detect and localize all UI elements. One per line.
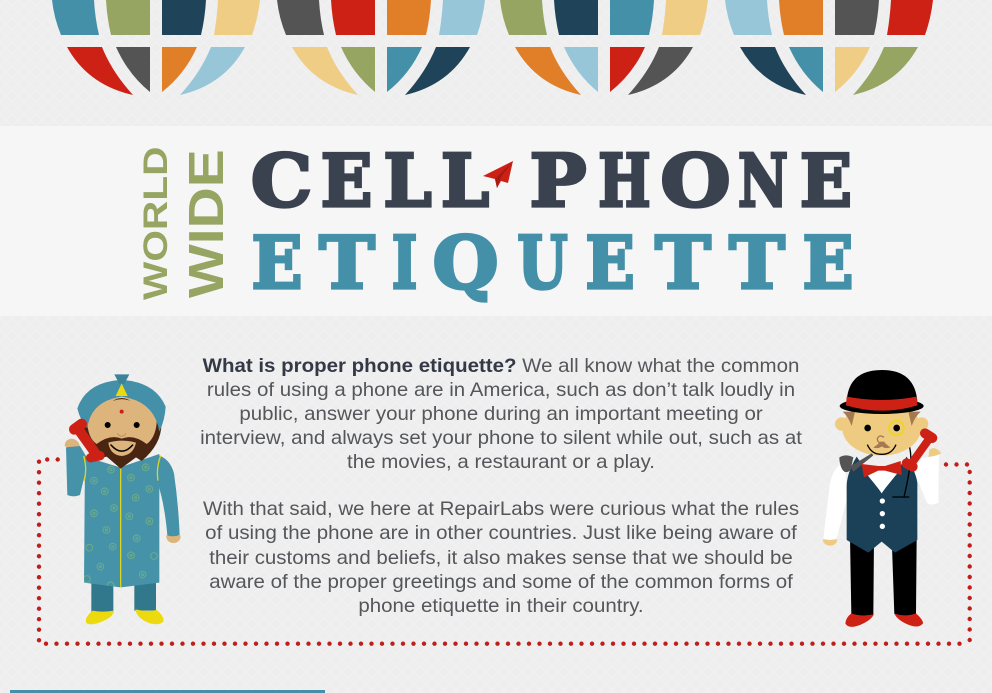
intro paragraph 1: rules of using a phone are in America, such as don’t talk loudly in <box>207 379 795 401</box>
turban knot <box>114 374 129 384</box>
waistcoat <box>847 457 917 553</box>
ears <box>835 417 928 431</box>
title: etiquette <box>251 221 854 306</box>
right white sleeve <box>913 455 939 505</box>
intro paragraph 2: phone etiquette in their country. <box>358 595 644 617</box>
eyes <box>105 422 140 428</box>
intro paragraph 1 <box>200 355 802 473</box>
intro paragraph 2 <box>203 498 799 617</box>
left hand <box>823 539 837 546</box>
character: man in turban on red phone <box>65 374 181 624</box>
title: world wide: WORLD <box>136 147 174 300</box>
title: cell phone: C <box>251 138 312 223</box>
title: world wide <box>136 147 234 300</box>
phone handset <box>907 433 932 467</box>
title: etiquette: E <box>251 222 303 306</box>
title: etiquette: T <box>729 221 785 306</box>
next section heading bar <box>10 690 325 693</box>
face <box>87 397 157 444</box>
hair parting <box>113 398 131 401</box>
title: etiquette: U <box>517 222 568 306</box>
title: cell phone: O <box>660 139 731 224</box>
title band <box>0 126 992 316</box>
trousers <box>850 537 917 616</box>
title: world wide: WIDE <box>180 149 234 298</box>
dotted red frame <box>39 460 970 644</box>
globe 3 <box>500 0 708 95</box>
trousers <box>91 582 156 613</box>
waistcoat buttons <box>880 498 885 529</box>
mouth area <box>108 441 136 456</box>
phone handset <box>74 424 100 458</box>
shirt front <box>863 470 900 493</box>
left white sleeve <box>823 462 847 540</box>
title: cell phone: E <box>321 139 372 224</box>
bowler hat <box>840 370 924 414</box>
turban jewel <box>116 383 128 396</box>
title: cell phone: N <box>738 140 788 224</box>
globe 2 <box>277 0 485 95</box>
bindi <box>120 410 124 414</box>
icon: red paper plane <box>483 161 513 188</box>
nose <box>117 433 126 436</box>
sideburns <box>843 412 921 426</box>
nose curl <box>877 436 884 443</box>
title: cell phone <box>251 138 852 224</box>
title: cell phone: L <box>383 138 432 223</box>
yellow shoes <box>86 609 164 624</box>
lowered arm and hand <box>166 535 181 543</box>
smile <box>111 445 133 451</box>
tunic with spots <box>84 454 161 589</box>
red shoes <box>845 613 923 627</box>
moustache <box>873 442 891 448</box>
intro paragraph 1: What is proper phone etiquette? We all know what the common <box>203 355 799 377</box>
title: etiquette: E <box>585 222 635 306</box>
title: etiquette: E <box>802 222 854 306</box>
bow tie <box>862 461 902 477</box>
title: etiquette: Q <box>433 222 498 306</box>
raised arm and hand <box>65 439 80 450</box>
intro paragraph 1: interview, and always set your phone to silent while out, such as at <box>200 427 802 449</box>
title: cell phone: E <box>800 138 852 223</box>
intro paragraph 2: of using the phone are in other countries. Just like being aware of <box>205 522 797 544</box>
face <box>842 401 921 456</box>
pocket and monocle chain <box>892 433 911 497</box>
title: cell phone: L <box>441 138 489 223</box>
intro paragraph 2: aware of the proper greetings and some of the common forms of <box>209 571 793 593</box>
beard <box>83 422 161 469</box>
title: cell phone: H <box>598 140 651 224</box>
turban <box>77 380 166 432</box>
pipe <box>839 453 873 472</box>
title: etiquette: I <box>392 222 417 306</box>
title: etiquette: T <box>319 221 375 306</box>
intro paragraph 2: With that said, we here at RepairLabs were curious what the rules <box>203 498 799 520</box>
eyes <box>864 425 900 431</box>
intro paragraph 1: public, answer your phone during an important meeting or <box>239 403 763 425</box>
globe 1 <box>52 0 260 95</box>
monocle <box>889 421 904 435</box>
title: cell phone: P <box>530 140 586 224</box>
globe 4 <box>725 0 933 95</box>
right hand <box>928 448 941 458</box>
intro paragraph 1: the movies, a restaurant or a play. <box>347 451 655 473</box>
smile <box>867 445 896 454</box>
intro paragraph 2: their customs and beliefs, it also makes sense that we should be <box>209 547 793 569</box>
character: gentleman with bowler hat, monocle and phone <box>823 370 941 627</box>
title: etiquette: T <box>655 221 711 306</box>
